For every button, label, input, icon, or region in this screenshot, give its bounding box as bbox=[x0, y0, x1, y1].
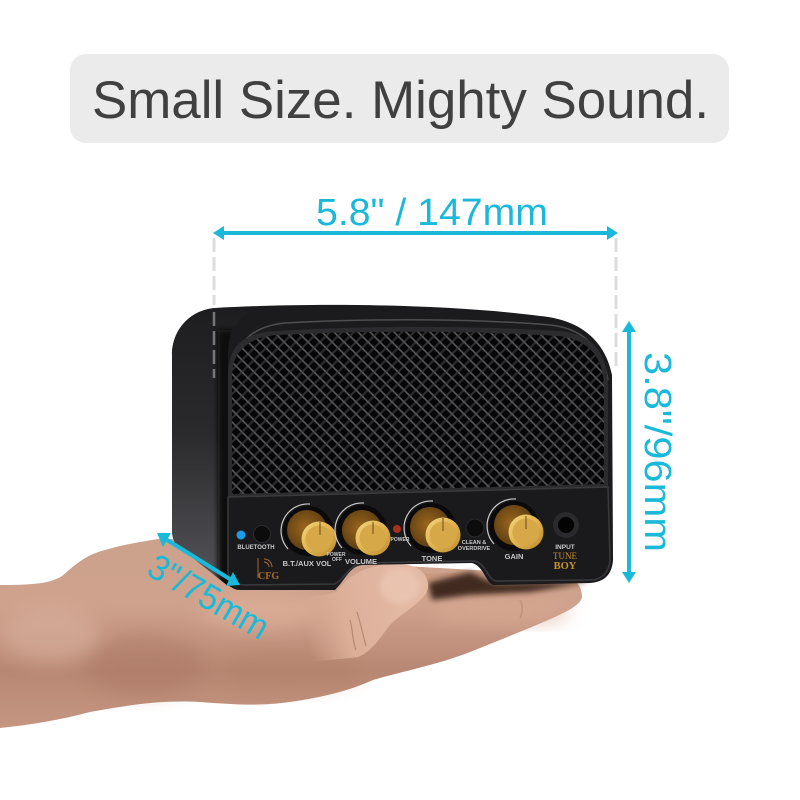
knob: VOLUME bbox=[335, 503, 390, 556]
height arrow bbox=[622, 321, 636, 583]
left width guide bbox=[212, 238, 216, 378]
brand: Tune Boy: TUNE bbox=[553, 551, 577, 561]
panel labels: TONE bbox=[422, 554, 442, 563]
depth arrow bbox=[157, 533, 240, 586]
title pill bbox=[70, 54, 729, 143]
brand: Tune Boy: BOY bbox=[554, 561, 577, 572]
finger sliver above shadow bbox=[425, 572, 468, 583]
title pill: Small Size. Mighty Sound. bbox=[92, 71, 709, 130]
panel labels: INPUT bbox=[555, 544, 575, 551]
width label: 5.8" / 147mm bbox=[316, 192, 548, 234]
thumb bbox=[273, 564, 428, 665]
side edge shade bbox=[218, 330, 234, 590]
panel labels: CLEAN & bbox=[462, 540, 486, 546]
depth label: 3"/75mm bbox=[141, 545, 277, 647]
amp side and shell bbox=[172, 305, 613, 590]
panel labels: OFF bbox=[332, 557, 342, 563]
panel labels: POWER bbox=[391, 537, 410, 543]
brand: CFG: CFG bbox=[258, 571, 279, 582]
width arrow bbox=[213, 226, 618, 240]
panel labels: POWER bbox=[327, 552, 346, 558]
LED and buttons bbox=[236, 512, 579, 542]
knob: B.T./AUX VOL bbox=[281, 504, 336, 556]
panel labels bbox=[237, 537, 575, 568]
brand: Tune Boy bbox=[553, 551, 577, 572]
height label: 3.8"/96mm bbox=[636, 352, 678, 552]
shadow under amp bbox=[428, 572, 590, 600]
grille bbox=[228, 327, 608, 497]
panel labels: BLUETOOTH bbox=[237, 545, 275, 551]
top rim bbox=[232, 320, 608, 380]
panel labels: B.T./AUX VOL bbox=[283, 559, 332, 568]
knob: TONE bbox=[404, 501, 460, 553]
brand: CFG bbox=[258, 558, 279, 582]
panel labels: OVERDRIVE bbox=[458, 546, 491, 552]
amplifier bbox=[172, 305, 613, 590]
knob: GAIN bbox=[487, 499, 544, 551]
right width guide bbox=[614, 238, 618, 368]
panel labels: VOLUME bbox=[345, 557, 377, 566]
panel labels: GAIN bbox=[505, 552, 523, 561]
control panel bbox=[228, 487, 610, 585]
hand bbox=[0, 538, 590, 728]
